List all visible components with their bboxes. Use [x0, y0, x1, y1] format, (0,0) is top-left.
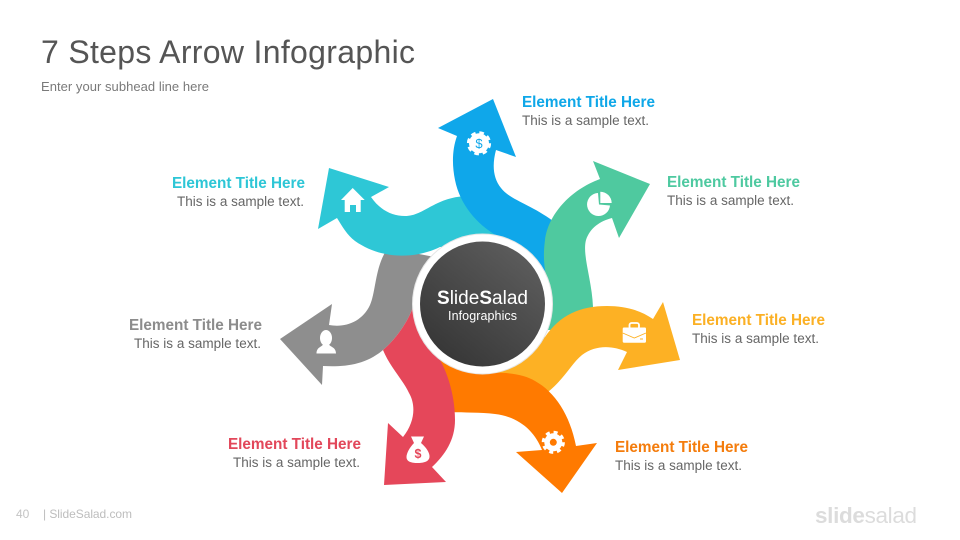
label: red — [228, 436, 361, 470]
label: gray — [129, 317, 262, 351]
label: orange: Element Title Here — [615, 439, 748, 456]
icon: money bag: $ — [415, 447, 422, 461]
page number: 40 — [16, 507, 30, 521]
icon: money bag — [406, 436, 430, 463]
center circle — [412, 234, 552, 374]
label: cyan: Element Title Here — [172, 175, 305, 192]
arrow: cyan — [318, 168, 500, 256]
label: blue — [522, 94, 655, 128]
label: cyan — [172, 175, 305, 209]
title: 7 Steps Arrow Infographic — [41, 34, 415, 70]
icon: briefcase — [623, 323, 646, 343]
label: green — [667, 174, 800, 208]
icon: gear — [543, 432, 563, 452]
label: yellow — [692, 312, 825, 346]
subhead: Enter your subhead line here — [41, 79, 209, 94]
label: green: Element Title Here — [667, 174, 800, 191]
label: blue: Element Title Here — [522, 94, 655, 111]
icon: dollar gear: $ — [475, 136, 483, 151]
arrow: blue — [438, 99, 553, 285]
label: orange — [615, 439, 748, 473]
label: red: This is a sample text. — [233, 455, 360, 470]
label: yellow: Element Title Here — [692, 312, 825, 329]
label: gray: Element Title Here — [129, 317, 262, 334]
icon: person — [316, 330, 336, 354]
label: red: Element Title Here — [228, 436, 361, 453]
label: yellow: This is a sample text. — [692, 331, 819, 346]
icon: pie chart — [587, 192, 612, 216]
center caption: Infographics — [448, 309, 517, 323]
arrow: gray — [280, 248, 450, 385]
arrow: red — [383, 307, 455, 485]
arrow: yellow — [480, 302, 680, 395]
label: orange: This is a sample text. — [615, 458, 742, 473]
label: gray: This is a sample text. — [134, 336, 261, 351]
label: blue: This is a sample text. — [522, 113, 649, 128]
arrow: orange — [430, 350, 597, 493]
arrow: green — [520, 161, 650, 330]
footer site name: | SlideSalad.com — [43, 507, 132, 521]
footer logo: slidesalad — [815, 503, 917, 528]
label: cyan: This is a sample text. — [177, 194, 304, 209]
label: green: This is a sample text. — [667, 193, 794, 208]
icon: dollar gear — [468, 133, 490, 154]
center brand: SlideSalad — [437, 288, 528, 309]
icon: house — [341, 188, 365, 212]
